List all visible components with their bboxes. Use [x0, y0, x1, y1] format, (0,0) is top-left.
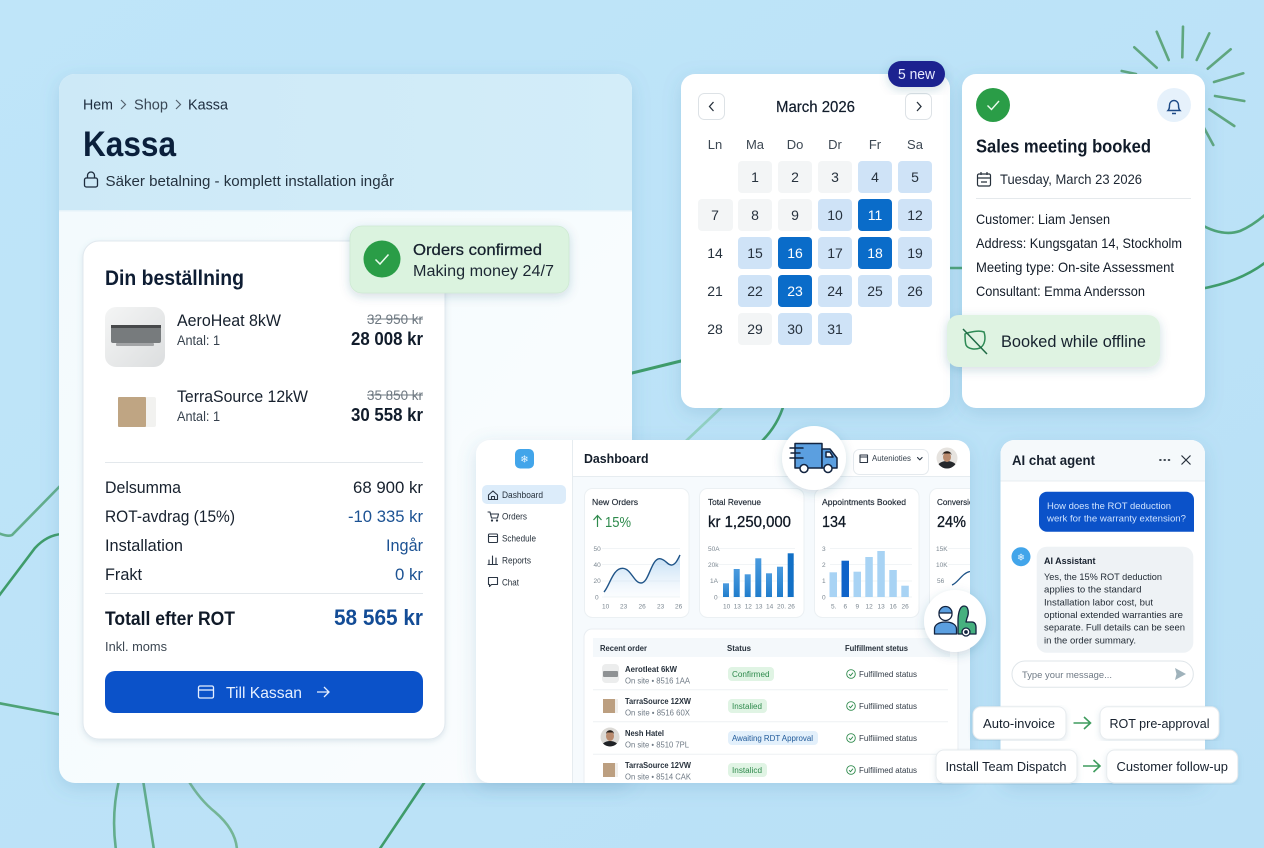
table: recent orders	[584, 629, 958, 799]
checkout button	[105, 671, 423, 713]
calendar date cells: 17	[827, 245, 843, 261]
line chart: 26	[675, 604, 683, 610]
stat card: conversion: 15K	[936, 546, 948, 553]
row: AeroHeat order: Fulfillmed status	[859, 670, 917, 679]
stat card: appointments booked	[814, 488, 919, 618]
product: AeroHeat: AeroHeat 8kW	[177, 311, 281, 330]
row: TarraSource second order: On site • 8514 CAK	[625, 772, 692, 782]
bar chart: 0	[714, 594, 718, 602]
stat card: total revenue: kr 1,250,000	[708, 514, 791, 531]
calendar date cells: 15	[747, 245, 763, 261]
icon: delivery truck badge	[782, 426, 846, 490]
row: Nesh Hatel order: Awaiting RDT Approval	[732, 734, 813, 743]
calendar date cells: 8	[751, 207, 759, 223]
row: TarraSource order: Fulfilimed status	[859, 702, 917, 711]
line chart: 23	[620, 604, 628, 610]
calendar date cells: 21	[707, 283, 723, 299]
price breakdown: Ingår	[386, 537, 423, 555]
calendar date cells: 2	[791, 169, 799, 185]
assistant message bubble	[1037, 547, 1193, 653]
calendar date cells: 19	[907, 245, 923, 261]
badge: 5 new: 5 new	[898, 66, 935, 83]
product: AeroHeat	[105, 307, 423, 367]
breadcrumb: Hem	[83, 98, 113, 114]
product: TerraSource	[118, 387, 423, 427]
line chart	[594, 546, 683, 610]
badge: 5 new	[888, 61, 945, 87]
bar chart: 20k	[708, 562, 719, 569]
bar chart: 6	[844, 604, 848, 610]
page title: Kassa	[83, 125, 176, 164]
chat header: AI chat agent	[1012, 452, 1095, 468]
calendar date cells: 9	[791, 207, 799, 223]
icon: logo: ❄	[520, 454, 529, 466]
workflow chips	[936, 707, 1238, 783]
stat card: conversion: 10K	[936, 562, 948, 569]
panel: sales meeting card	[962, 74, 1205, 408]
avatar	[936, 448, 958, 468]
total	[105, 605, 423, 654]
calendar date cells: 25	[867, 283, 883, 299]
breadcrumb	[83, 98, 229, 114]
bar chart: 14	[766, 604, 774, 610]
calendar date cells: 24	[827, 283, 843, 299]
calendar date cells: 26	[907, 283, 923, 299]
user message bubble: werk for the warranty extension?	[1046, 514, 1186, 525]
stat card: total revenue: Total Revenue	[708, 497, 761, 507]
weekday labels: Dr	[828, 137, 843, 152]
table: recent orders: Status	[727, 644, 752, 653]
calendar date cells: 7	[711, 207, 719, 223]
stat card: new orders: New Orders	[592, 497, 638, 507]
panel: AI chat agent	[1000, 440, 1205, 783]
weekday labels: Sa	[907, 137, 924, 152]
meeting details: Address: Kungsgatan 14, Stockholm	[976, 235, 1182, 251]
line chart: 40	[594, 562, 601, 569]
bar chart: 26	[788, 604, 795, 610]
assistant message bubble: optional extended warranties are	[1044, 610, 1183, 621]
price breakdown: 68 900 kr	[353, 479, 424, 497]
chip: ROT pre-approval: ROT pre-approval	[1110, 716, 1210, 731]
assistant message bubble: applies to the standard	[1044, 585, 1142, 596]
bar chart: 50A	[708, 546, 720, 553]
total: 58 565 kr	[334, 605, 423, 630]
user message bubble: How does the ROT deduction	[1047, 501, 1171, 512]
chip: auto-invoice: Auto-invoice	[983, 716, 1055, 731]
secure payment note: Säker betalning - komplett installation ingår	[106, 173, 394, 190]
icon: success check	[976, 88, 1010, 122]
chat header	[1000, 440, 1205, 482]
assistant message bubble: Yes, the 15% ROT deduction	[1044, 572, 1162, 583]
product: TerraSource: TerraSource 12kW	[177, 387, 308, 406]
stat card: appointments booked: Appointments Booked	[822, 497, 906, 507]
sunburst accent rays	[1122, 27, 1244, 145]
filter dropdown: Autenioties	[872, 454, 911, 463]
line chart: 10	[602, 604, 610, 610]
meeting details	[976, 211, 1182, 299]
bar chart: 13	[734, 604, 741, 610]
bar chart: 10	[723, 604, 731, 610]
toast: booked while offline: Booked while offline	[1001, 333, 1146, 351]
chip: ROT pre-approval	[1100, 707, 1219, 739]
price breakdown: Frakt	[105, 566, 142, 584]
chip: install team dispatch: Install Team Dispatch	[946, 759, 1066, 774]
icon: install team badge	[924, 590, 986, 652]
icon: bell	[1157, 88, 1191, 122]
product: AeroHeat: 28 008 kr	[351, 329, 423, 349]
meeting details: Customer: Liam Jensen	[976, 211, 1110, 227]
stat card: conversion	[929, 488, 970, 604]
stat card: conversion: 24%	[937, 514, 966, 531]
row: Nesh Hatel order	[600, 728, 917, 748]
toast: booked while offline	[947, 315, 1160, 367]
calendar date cells: 16	[787, 245, 803, 261]
price breakdown: Installation	[105, 537, 183, 555]
row: TarraSource second order: Instalicd	[732, 766, 762, 775]
row: TarraSource order: Instalied	[732, 702, 762, 711]
stat card: total revenue	[700, 488, 804, 618]
bar chart: 13	[878, 604, 885, 610]
stat card: appointments booked: 134	[822, 514, 846, 531]
calendar date cells: 11	[868, 207, 882, 223]
row: AeroHeat order: Confirmed	[732, 670, 770, 679]
calendar date cells: 14	[707, 245, 723, 261]
checkout header band	[59, 74, 632, 212]
sidebar navigation: Schedule	[502, 534, 536, 544]
order heading: Din beställning	[105, 267, 244, 290]
toast: orders confirmed	[350, 226, 569, 293]
bar chart: 3	[822, 546, 826, 553]
row: TarraSource second order: Fulfilimed atatus	[859, 766, 917, 775]
assistant message bubble: separate. Full details can be seen	[1044, 623, 1185, 634]
calendar date cells: 3	[831, 169, 839, 185]
weekday labels: Ln	[708, 137, 722, 152]
breadcrumb: Shop	[134, 98, 168, 114]
calendar date cells: 31	[827, 321, 843, 337]
bar chart: 16	[890, 604, 897, 610]
calendar date cells: 12	[907, 207, 923, 223]
panel: checkout page	[59, 74, 632, 783]
calendar date cells: 29	[747, 321, 763, 337]
bar chart: 9	[856, 604, 860, 610]
price breakdown: ROT-avdrag (15%)	[105, 508, 235, 526]
meeting date: Tuesday, March 23 2026	[1000, 171, 1142, 187]
product: TerraSource: Antal: 1	[177, 409, 220, 424]
calendar date cells: 30	[787, 321, 803, 337]
sidebar navigation: Dashboard	[502, 490, 543, 501]
weekday labels: Fr	[869, 137, 882, 152]
stat card: new orders	[584, 488, 689, 618]
price breakdown: -10 335 kr	[348, 508, 424, 526]
calendar date cells: 1	[751, 169, 759, 185]
row: TarraSource order: TarraSource 12XW	[625, 697, 691, 706]
sidebar navigation	[482, 449, 566, 588]
chip: install team dispatch	[936, 750, 1077, 783]
product: TerraSource: 30 558 kr	[351, 405, 423, 425]
chip: customer follow-up	[1107, 750, 1238, 783]
calendar date cells: 18	[867, 245, 883, 261]
weekday labels: Ma	[746, 137, 765, 152]
stat card: conversion: 56	[937, 578, 945, 585]
product: AeroHeat: 32 950 kr	[367, 311, 423, 327]
table: recent orders: Fulfillment stetus	[845, 644, 909, 653]
row: TarraSource order	[603, 698, 917, 716]
chip: customer follow-up: Customer follow-up	[1116, 759, 1228, 774]
line chart: 0	[595, 594, 599, 602]
calendar date cells: 10	[827, 207, 843, 223]
row: TarraSource second order: TarraSource 12VW	[625, 761, 691, 770]
stat card: conversion: Conversion	[937, 497, 978, 507]
stat card: new orders: 15%	[605, 514, 631, 531]
message input	[1012, 661, 1193, 687]
price breakdown: 0 kr	[395, 566, 424, 584]
price breakdown	[105, 479, 424, 584]
bar chart: 1A	[710, 578, 719, 585]
bar chart: 0	[822, 594, 826, 602]
checkout button: Till Kassan	[226, 685, 302, 702]
bar chart: 13	[755, 604, 763, 610]
toast: orders confirmed: Making money 24/7	[413, 263, 554, 280]
breadcrumb: Kassa	[188, 98, 229, 114]
meeting heading: Sales meeting booked	[976, 136, 1151, 156]
sidebar navigation: Reports	[502, 556, 531, 566]
row: AeroHeat order: Aerotleat 6kW	[625, 665, 677, 674]
product: AeroHeat: Antal: 1	[177, 333, 220, 348]
calendar date cells	[698, 161, 932, 345]
total: Inkl. moms	[105, 639, 167, 654]
user message bubble	[1039, 492, 1194, 532]
meeting details: Consultant: Emma Andersson	[976, 283, 1145, 299]
calendar date cells: 5	[911, 169, 919, 185]
line chart: 20	[594, 578, 601, 585]
panel: dashboard	[476, 440, 990, 799]
panel: booking calendar	[681, 61, 950, 408]
sidebar navigation: Orders	[502, 512, 527, 522]
calendar header: March 2026	[776, 99, 855, 116]
icon: assistant avatar: ❄	[1017, 552, 1025, 564]
row: AeroHeat order: On site • 8516 1AA	[625, 676, 691, 686]
line chart: 50	[594, 546, 601, 553]
assistant message bubble: AI Assistant	[1044, 556, 1096, 567]
dashboard title: Dashboard	[584, 451, 649, 466]
sidebar navigation: Chat	[502, 578, 519, 588]
row: Nesh Hatel order: On site • 8510 7PL	[625, 740, 690, 750]
price breakdown: Delsumma	[105, 479, 182, 497]
bar chart	[822, 546, 912, 610]
meeting details: Meeting type: On-site Assessment	[976, 259, 1174, 275]
row: Nesh Hatel order: Fulfiiimed status	[859, 734, 917, 743]
icon: assistant avatar	[1012, 547, 1030, 566]
bar chart: 12	[745, 604, 752, 610]
icon: offline leaf	[963, 329, 987, 354]
calendar date cells: 4	[871, 169, 879, 185]
table: recent orders: Recent order	[600, 644, 647, 653]
arrow	[1083, 760, 1100, 772]
calendar date cells: 28	[707, 321, 723, 337]
assistant message bubble: Installation labor cost, but	[1044, 597, 1153, 608]
bar chart: 1	[822, 578, 826, 585]
bar chart: 5.	[831, 604, 837, 610]
total: Totall efter ROT	[105, 609, 235, 630]
toast: orders confirmed: Orders confirmed	[413, 242, 542, 259]
calendar date cells: 23	[787, 283, 803, 299]
row: Nesh Hatel order: Nesh Hatel	[625, 729, 664, 738]
bar chart: 20.	[777, 604, 786, 610]
bar chart: 26	[902, 604, 909, 610]
line chart: 23	[657, 604, 665, 610]
weekday labels	[708, 137, 924, 152]
bar chart	[708, 546, 795, 610]
chip: auto-invoice	[973, 707, 1066, 739]
weekday labels: Do	[787, 137, 803, 152]
row: TarraSource second order	[603, 762, 917, 780]
bar chart: 2	[822, 562, 826, 569]
product: TerraSource: 35 850 kr	[367, 387, 423, 403]
arrow	[1074, 717, 1090, 729]
assistant message bubble: in the order summary.	[1044, 635, 1136, 646]
panel: order summary card	[83, 241, 445, 739]
decorative green network lines	[0, 214, 1264, 848]
message input: Type your message...	[1022, 670, 1112, 681]
line chart: 26	[638, 604, 646, 610]
row: AeroHeat order	[602, 664, 917, 686]
calendar header	[698, 94, 932, 120]
calendar date cells: 22	[747, 283, 763, 299]
row: TarraSource order: On site • 8516 60X	[625, 708, 691, 718]
bar chart: 12	[866, 604, 873, 610]
filter dropdown	[854, 450, 928, 474]
